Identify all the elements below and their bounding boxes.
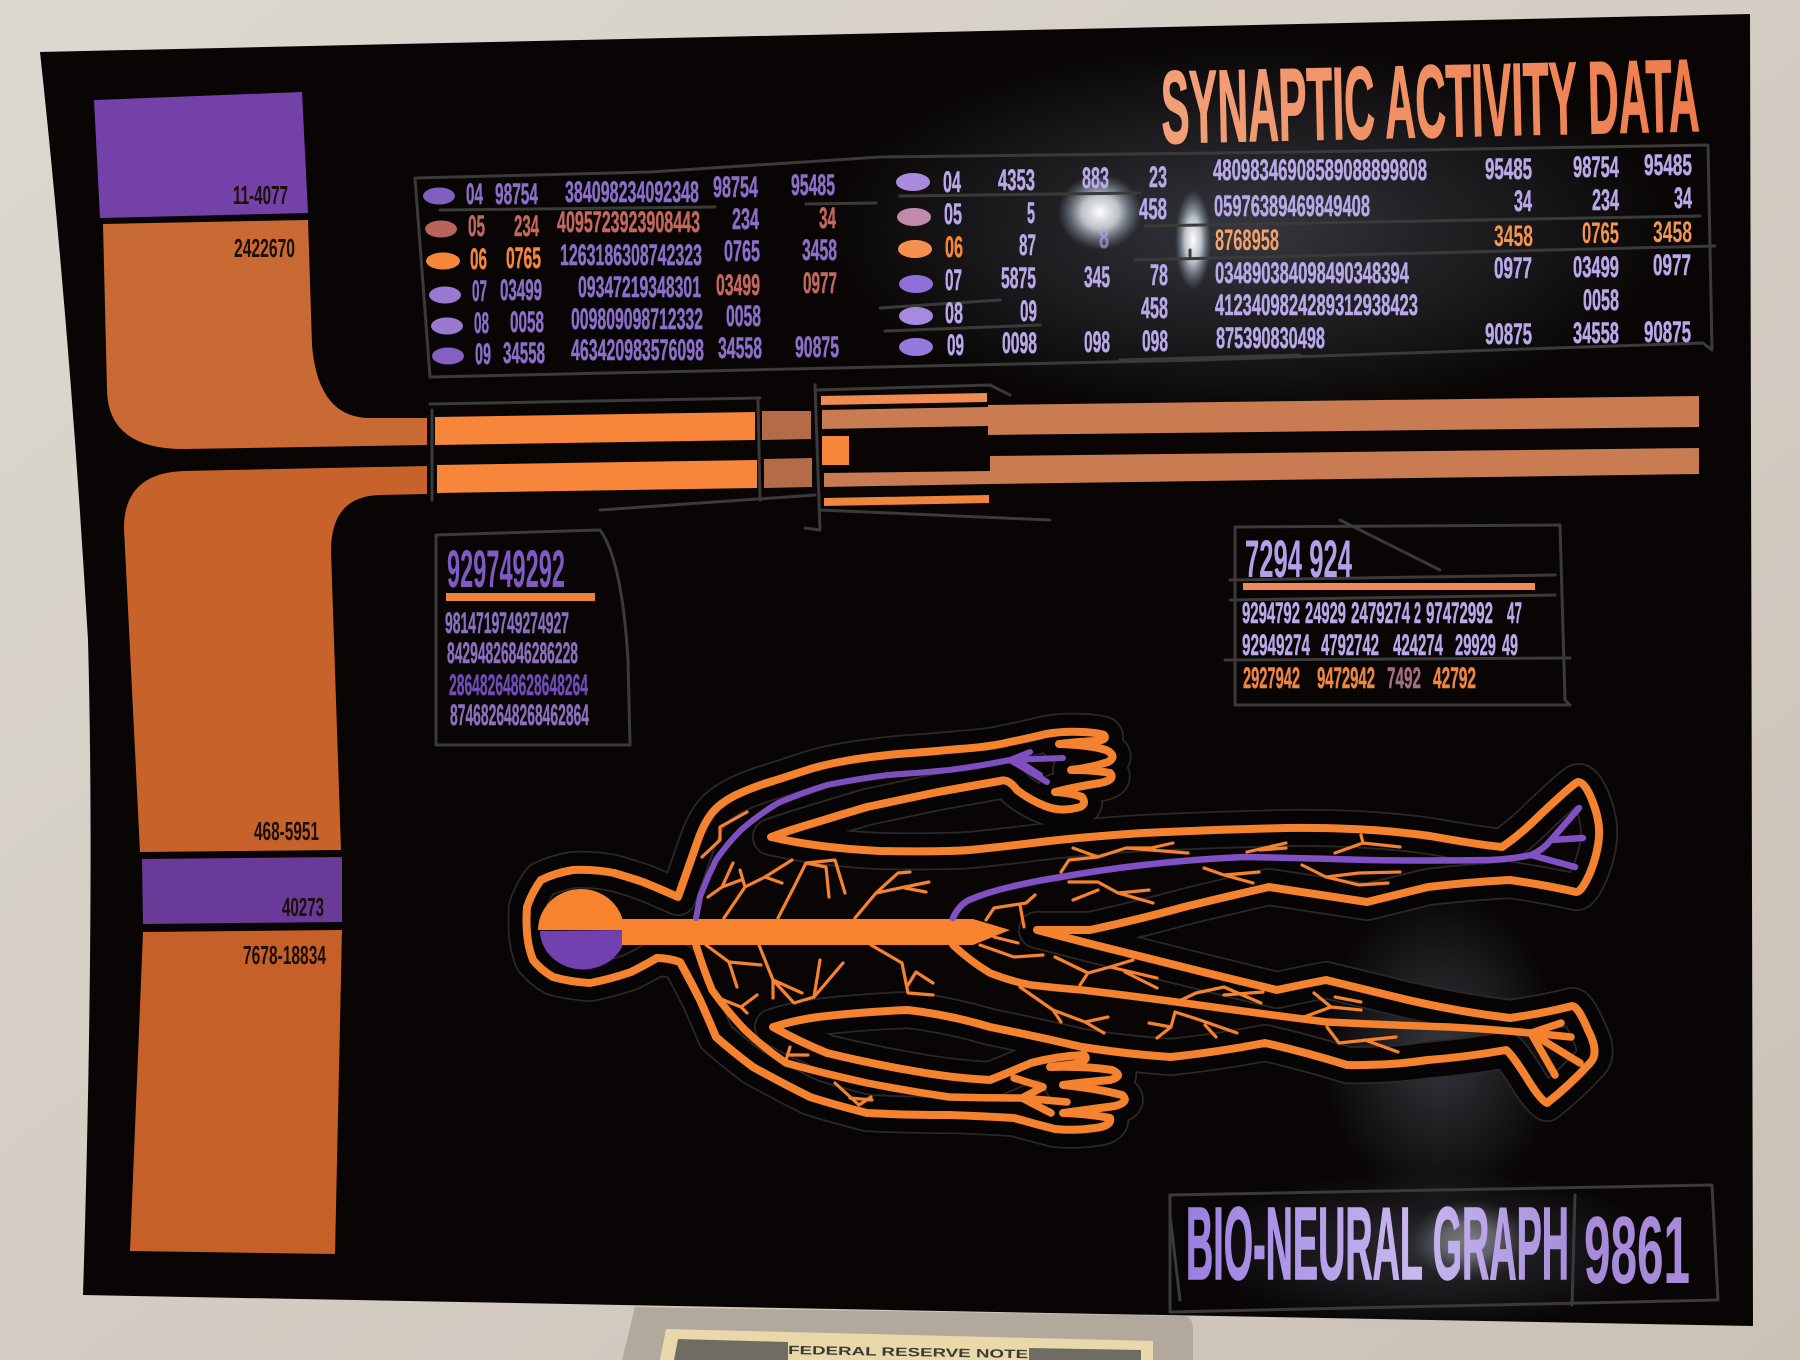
row 09: 90875: [1485, 318, 1532, 351]
row 07: 78: [1150, 259, 1168, 292]
row 04: 04: [943, 166, 961, 199]
body orange outline: [526, 732, 1599, 1130]
bio-neural graph: human body: [526, 732, 1599, 1130]
note heading: FEDERAL RESERVE NOTE: [788, 1343, 1028, 1360]
row 08: 0058: [1583, 284, 1619, 317]
number line 2: 92949274: [1242, 629, 1310, 662]
number lines: [445, 607, 589, 732]
row 04: 98754: [495, 178, 538, 211]
row 07: 345: [1084, 261, 1110, 294]
number line 2: 424274: [1393, 629, 1443, 662]
label: 40273: 40273: [282, 892, 324, 922]
row 07: 07: [945, 264, 962, 297]
panel: right number block: 47: [1507, 597, 1522, 630]
row 06: 3458: [1494, 220, 1533, 253]
body black inset: [526, 732, 1599, 1130]
row 05: 05: [468, 210, 485, 243]
block: lower orange: [130, 930, 342, 1254]
row 08: 009809098712332: [571, 303, 703, 336]
orange trunk: lower leg: [953, 945, 1580, 1075]
text: 9861: [1584, 1197, 1690, 1304]
row 07: 07: [472, 275, 487, 308]
number line 3: 2927942: [1243, 662, 1300, 695]
nerve branches: [702, 812, 1400, 1105]
row 09: 098: [1084, 326, 1110, 359]
row 09: 875390830498: [1216, 322, 1325, 355]
row 07: 0977: [803, 267, 837, 300]
row 06: 0765: [724, 235, 760, 268]
bar: upper long copper: [822, 396, 1699, 435]
panel: horizontal bars: [435, 393, 1699, 506]
bar: upper brown: [762, 411, 811, 440]
row 04: 23: [1149, 161, 1167, 194]
row 05: 34: [1514, 185, 1532, 218]
row 05: 5: [1027, 197, 1035, 230]
number line 2: 29929: [1455, 629, 1496, 662]
block: top purple: [94, 92, 308, 218]
row 06: 3458: [1653, 216, 1692, 249]
row 05: 34: [819, 202, 836, 235]
row 07: [899, 249, 1691, 297]
row 07: 03499: [500, 274, 542, 307]
row 06: 3458: [802, 234, 837, 267]
row 06: 1263186308742323: [560, 239, 702, 272]
row 04: 98754: [1573, 151, 1619, 184]
row 08: 4123409824289312938423: [1215, 289, 1418, 322]
row 08: 08: [945, 297, 963, 330]
row 07: 03499: [1573, 251, 1619, 284]
panel: right number block: [1242, 530, 1535, 695]
row 04: 4353: [998, 164, 1035, 197]
panel: right number block: 7294 924: [1245, 530, 1352, 589]
panel: left number block: 929749292: [447, 540, 565, 599]
number line 1: 97472992: [1426, 597, 1493, 630]
panel: right number block: 49: [1502, 629, 1518, 662]
orange trunk: lower arm: [696, 945, 1067, 1113]
row 09: 90875: [1644, 316, 1691, 349]
row 09: 09: [947, 329, 964, 362]
row 04: 95485: [1485, 153, 1532, 186]
row 07: [429, 267, 837, 308]
row 04: 95485: [1644, 149, 1692, 182]
purple nerve: leg: [953, 808, 1583, 918]
row 04: [896, 149, 1692, 199]
orange rule: [446, 593, 595, 601]
row 05: 4095723923908443: [557, 206, 700, 239]
row 09: 34558: [1573, 317, 1619, 350]
text: 286482648628648264: [449, 669, 588, 702]
reflection haze on sheet: [820, 40, 1680, 1330]
row 04: 95485: [791, 169, 835, 202]
row 08: 0058: [726, 300, 761, 333]
row 05: 234: [1592, 184, 1619, 217]
block: upper orange elbow: [103, 220, 427, 449]
block: lower orange elbow: [124, 466, 427, 852]
number line 3: [1243, 662, 1476, 695]
row 08: 0058: [510, 306, 544, 339]
row 06: [898, 216, 1692, 264]
row 06: [426, 234, 837, 276]
row 08: 458: [1141, 292, 1168, 325]
body pencil halo: [526, 732, 1599, 1130]
number line 3: 9472942: [1317, 662, 1375, 695]
row 05: 234: [514, 210, 539, 243]
number lines: 9814719749274927: [445, 607, 569, 640]
bar: upper bright orange: [435, 412, 755, 445]
row 07: 0977: [1494, 252, 1532, 285]
text: 874682648268462864: [450, 699, 589, 732]
row 06: 0765: [1582, 217, 1619, 250]
bar: lower bright orange: [437, 460, 757, 493]
head: purple lower half: [540, 930, 626, 969]
row 08: [431, 300, 761, 340]
panel: left number block: [445, 540, 595, 732]
row 04: 04: [466, 178, 483, 211]
row 09: 90875: [795, 331, 839, 364]
note left print band: [674, 1339, 788, 1360]
row 09: 34558: [718, 332, 762, 365]
row 07: 09347219348301: [578, 271, 701, 304]
row 06: 0765: [506, 242, 541, 275]
number line 1: 2: [1414, 597, 1421, 630]
spinal trunk: [622, 919, 1010, 945]
row 05: [425, 202, 836, 243]
row 06: 8768958: [1215, 224, 1279, 257]
bar: lower brown: [764, 458, 812, 488]
row 05: [897, 182, 1692, 231]
row 09: 09: [475, 338, 491, 371]
row 04: 384098234092348: [565, 176, 699, 209]
number line 1: 24929: [1305, 597, 1346, 630]
number line 1: 9294792: [1242, 597, 1300, 630]
orange rule: [1243, 583, 1535, 590]
row 08: 08: [474, 307, 489, 340]
row 09: [432, 331, 839, 371]
row 07: 0977: [1653, 249, 1691, 282]
row 09: 34558: [503, 337, 545, 370]
head: orange upper half: [538, 889, 624, 930]
row 05: 458: [1139, 193, 1167, 226]
number line 3: 42792: [1433, 662, 1476, 695]
number lines: 84294826846286228: [447, 637, 578, 670]
panel: data table right: [896, 149, 1692, 362]
label: 468-5951: 468-5951: [254, 816, 319, 846]
pencil guide lines: [415, 145, 1718, 1312]
row 09: [899, 316, 1691, 362]
dollar bill in holder: [622, 1307, 1193, 1360]
row 05: 34: [1674, 182, 1692, 215]
row 09: 463420983576098: [571, 334, 704, 367]
row 07: 5875: [1001, 262, 1036, 295]
number line 2: 4792742: [1321, 629, 1379, 662]
number line 1: [1242, 597, 1522, 630]
row 06: 8: [1099, 222, 1109, 255]
label: 7678-18834: 7678-18834: [243, 940, 326, 970]
note right print band: [1029, 1348, 1141, 1360]
block: middle purple: [142, 857, 342, 924]
row 04: [423, 169, 835, 211]
number line 1: 2479274: [1351, 597, 1410, 630]
plastic holder: [622, 1307, 1193, 1360]
bar: top thin stripe: [821, 393, 987, 405]
number line 3: 7492: [1387, 662, 1421, 695]
bar: bottom thin stripe: [824, 495, 989, 506]
label: 2422670: 2422670: [234, 233, 295, 263]
bar: orange square: [822, 436, 849, 465]
row 05: 05976389469849408: [1214, 190, 1370, 223]
banknote: [660, 1329, 1153, 1360]
row 04: 883: [1082, 162, 1109, 195]
row 05: 05: [944, 198, 962, 231]
row 07: 03499: [716, 269, 760, 302]
row 08: 09: [1020, 295, 1037, 328]
number line 2: [1242, 629, 1518, 662]
bar: lower long copper: [824, 448, 1699, 487]
row 08: [899, 284, 1619, 330]
row 06: 87: [1019, 229, 1036, 262]
panel: data table left: [423, 169, 839, 371]
panel: left control column: [94, 92, 427, 1254]
label: 11-4077: 11-4077: [233, 180, 288, 210]
row 04: 98754: [713, 171, 758, 204]
row 05: 234: [732, 203, 759, 236]
purple nerve: arm: [696, 752, 1063, 918]
row 04: 48098346908589088899808: [1213, 154, 1427, 187]
row 09: 098: [1142, 325, 1168, 358]
row 06: 06: [945, 231, 963, 264]
row 07: 034890384098490348394: [1215, 257, 1409, 290]
row 06: 06: [470, 243, 487, 276]
row 09: 0098: [1002, 327, 1037, 360]
